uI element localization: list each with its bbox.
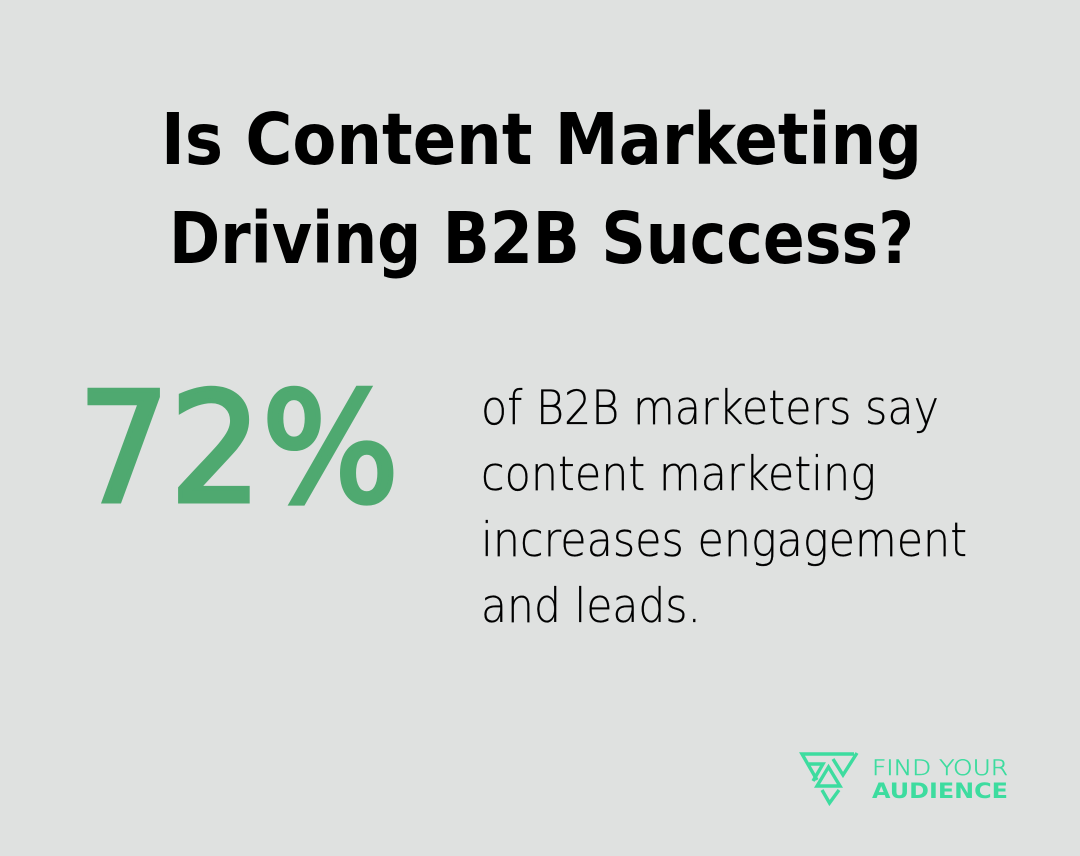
stat description: and leads. [481, 579, 701, 634]
title [161, 98, 922, 280]
logo: Find Your Audience [802, 753, 1008, 803]
big stat: 72%: 72% [78, 360, 399, 537]
logo wordmark: AUDIENCE [872, 779, 1008, 803]
logo wordmark [872, 756, 1008, 803]
logo wordmark: FIND YOUR [872, 756, 1008, 780]
stat description: of B2B marketers say [481, 381, 939, 436]
title: Driving B2B Success? [169, 197, 914, 280]
stat description [481, 381, 967, 634]
title: Is Content Marketing [161, 98, 922, 181]
stat description: increases engagement [481, 513, 967, 568]
stat description: content marketing [481, 447, 876, 502]
icon: triangle logo mark [802, 753, 857, 803]
